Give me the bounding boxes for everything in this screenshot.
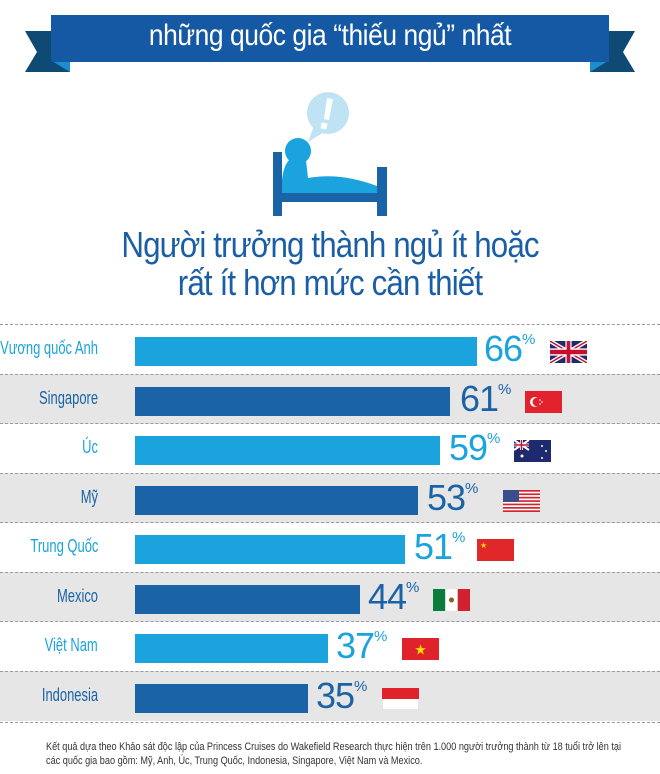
row: USA: 53% (427, 477, 478, 518)
headline (121, 224, 539, 303)
speech bubble (307, 92, 349, 134)
row: Vietnam: Việt Nam (45, 635, 98, 655)
flag CN (477, 539, 514, 561)
bed (273, 152, 282, 216)
row: China: Trung Quốc (30, 536, 98, 556)
row: Australia: Úc (82, 437, 98, 457)
banner title: những quốc gia “thiếu ngủ” nhất (149, 19, 511, 52)
row: Mexico (0, 572, 660, 622)
flag AU (514, 440, 551, 462)
flag VN (402, 638, 439, 660)
row: Singapore (0, 374, 660, 424)
row: Indonesia: 35% (316, 675, 367, 716)
row: Singapore: 61% (460, 378, 511, 419)
row: Vietnam: 37% (336, 625, 387, 666)
footnote: các quốc gia bao gồm: Mỹ, Anh, Úc, Trung Quốc, Indonesia, Singapore, Việt Nam và Mexico. (46, 755, 422, 767)
headline: Người trưởng thành ngủ ít hoặc (121, 224, 539, 265)
row: UK (0, 324, 660, 374)
headline: rất ít hơn mức cần thiết (178, 262, 482, 303)
footnote (46, 741, 621, 767)
row: Singapore: Singapore (39, 388, 98, 408)
flag UK (550, 341, 587, 363)
flag US (503, 490, 540, 512)
row: China: 51% (414, 526, 465, 567)
row: Vietnam (0, 621, 660, 671)
flag ID (382, 688, 419, 710)
row: Indonesia: Indonesia (42, 685, 98, 705)
row: Indonesia (0, 671, 660, 721)
icon: bed with person (273, 92, 387, 216)
row: Mexico: Mexico (57, 586, 98, 606)
row: UK: 66% (484, 328, 535, 369)
chart: countries (0, 324, 660, 723)
banner (25, 15, 635, 72)
row: Mexico: 44% (368, 576, 419, 617)
row: China (0, 522, 660, 572)
row: Australia: 59% (449, 427, 500, 468)
row: UK: Vương quốc Anh (0, 338, 98, 358)
flag CN: ★ (480, 541, 487, 550)
flag MX (433, 589, 470, 611)
footnote: Kết quả dựa theo Khảo sát độc lập của Princess Cruises do Wakefield Research thực hiện trên 1.000 người trưởng thành từ 18 tuổi trở lên tại (46, 741, 621, 753)
row: Australia (0, 423, 660, 473)
flag SG (525, 391, 562, 413)
flag VN: ★ (414, 642, 427, 658)
row: USA: Mỹ (81, 487, 98, 507)
row: USA (0, 473, 660, 523)
